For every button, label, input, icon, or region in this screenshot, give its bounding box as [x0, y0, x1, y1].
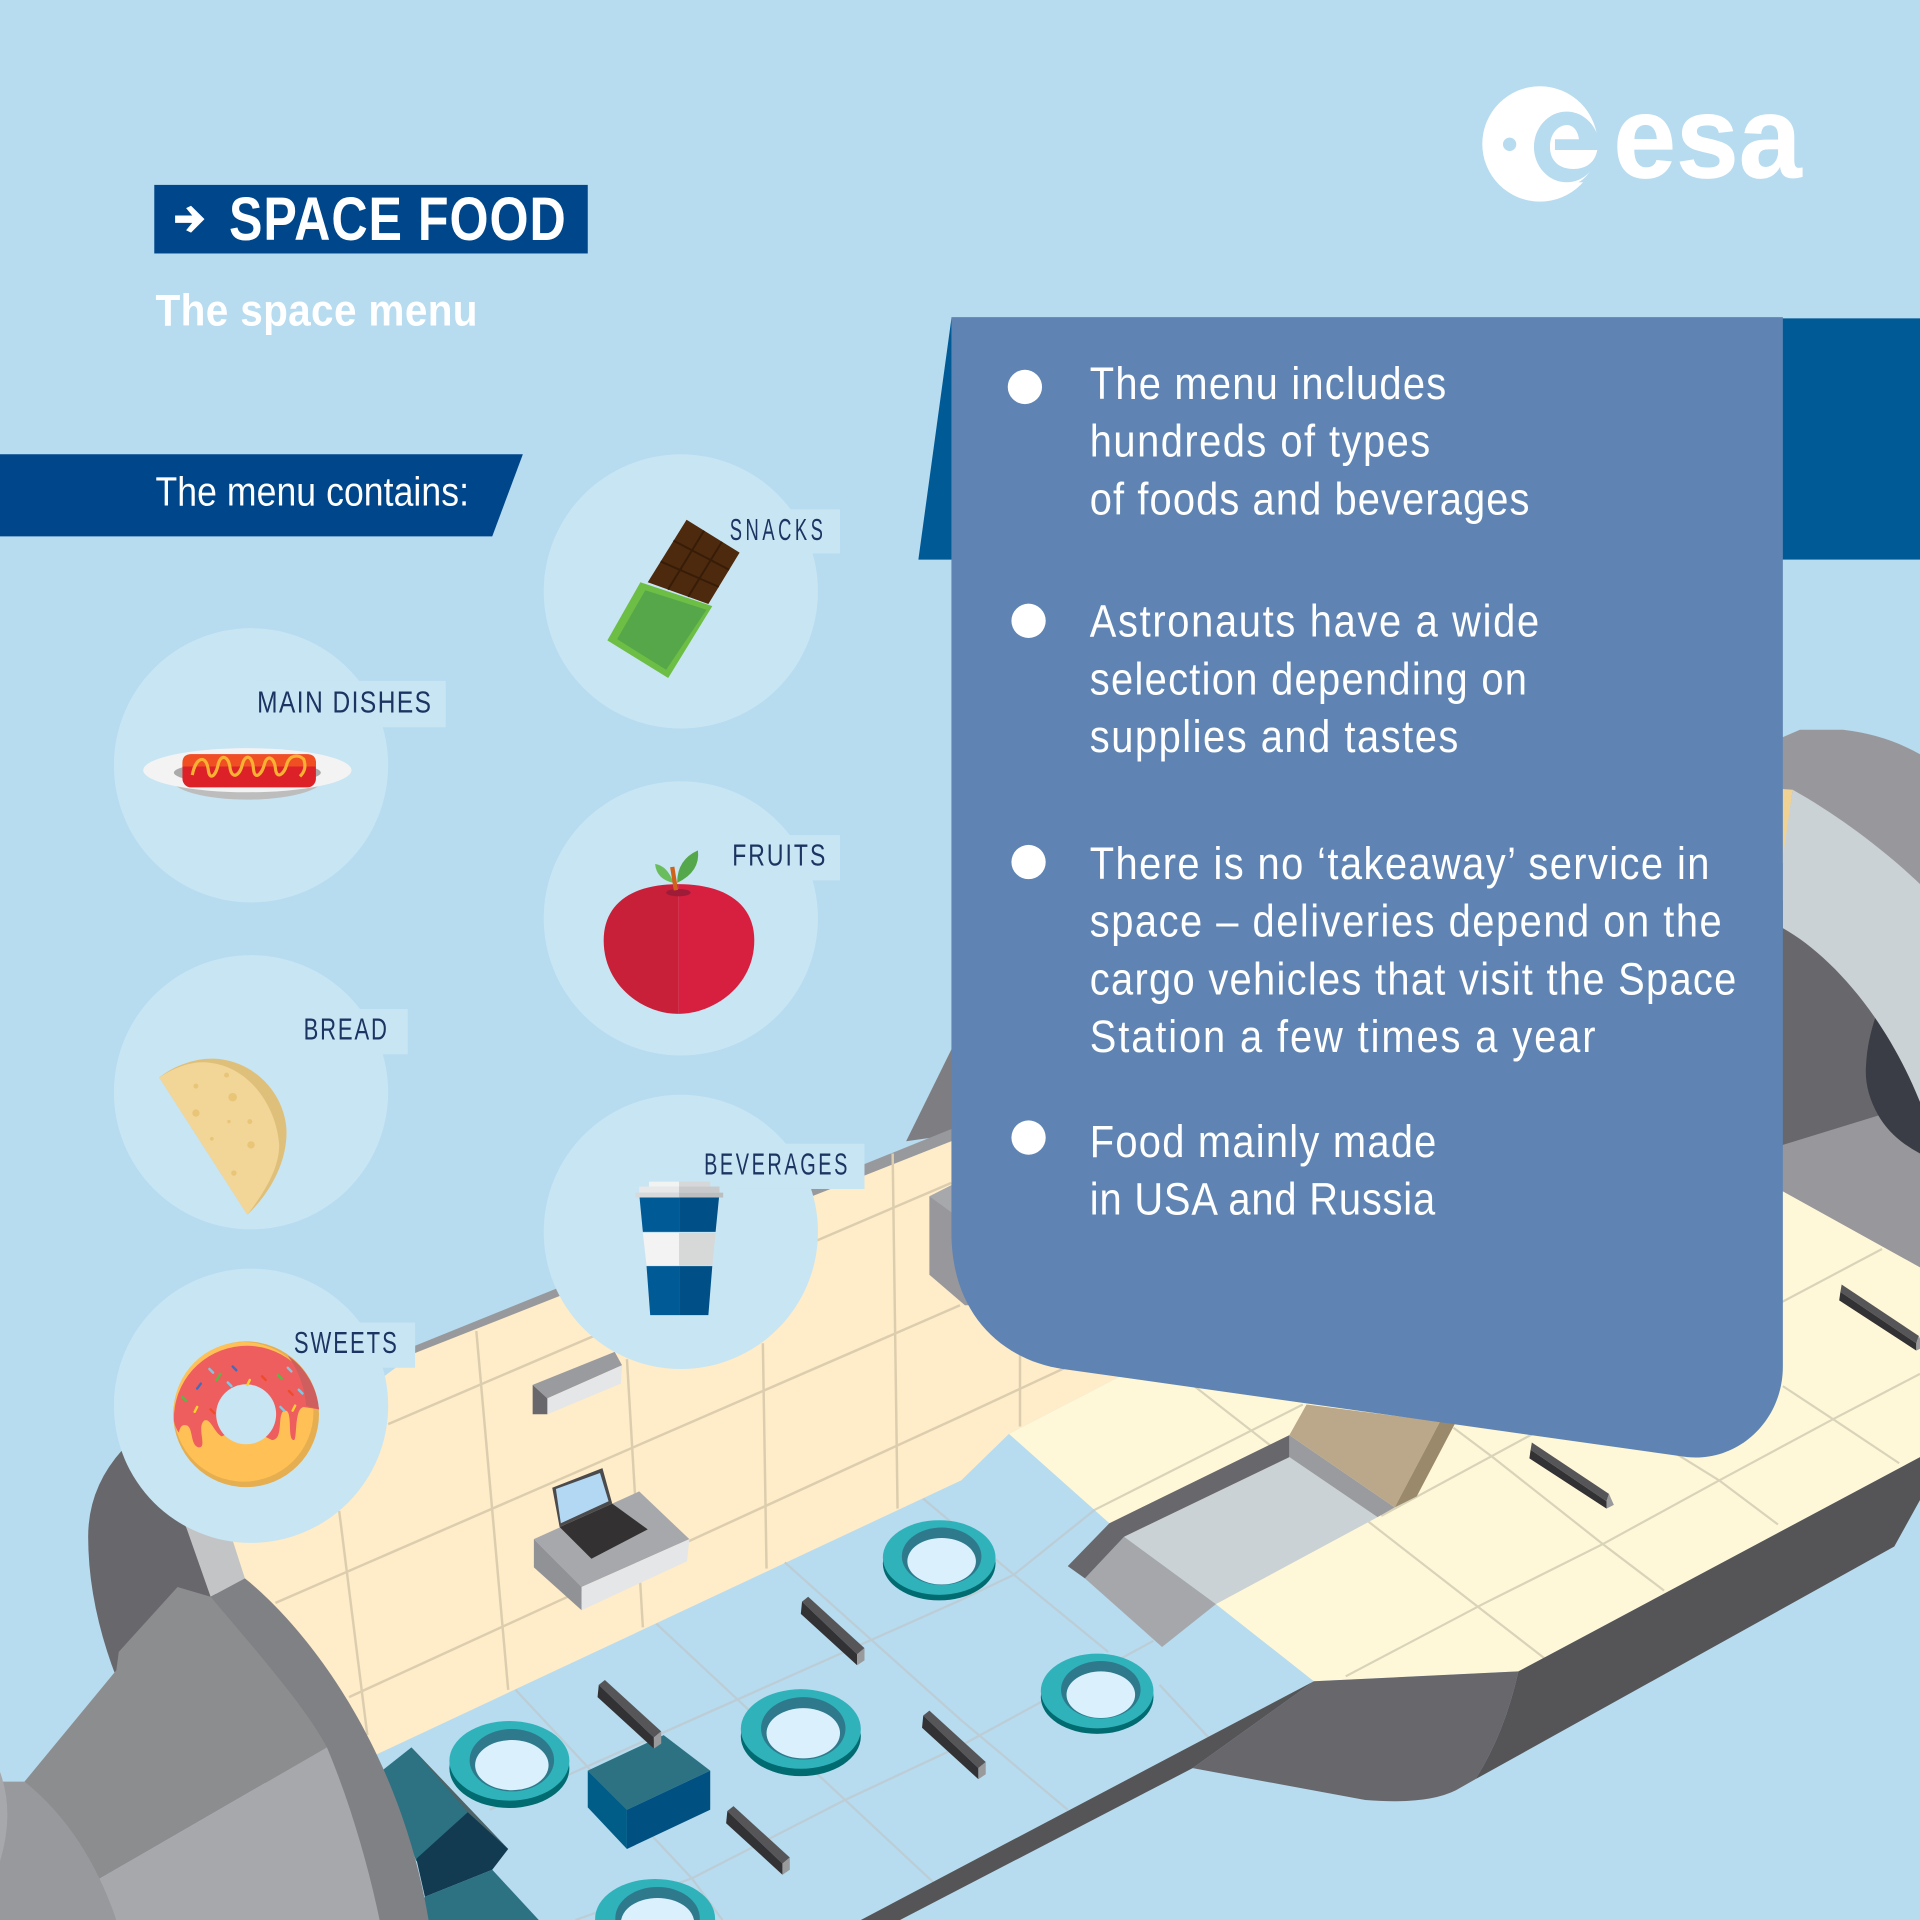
- bullet: hundreds of foods: hundreds of types: [1090, 416, 1430, 467]
- food circle: fruits: FRUITS: [732, 839, 825, 873]
- bullet: made in USA and Russia: in USA and Russia: [1090, 1174, 1435, 1225]
- left end module of the station: [0, 1450, 429, 1920]
- floor handrails: [598, 1284, 1920, 1875]
- teal floor cube: [588, 1735, 710, 1849]
- title: SPACE FOOD: [229, 184, 566, 253]
- floor underside: [861, 1457, 1920, 1920]
- bullet: hundreds of foods: of foods and beverages: [1090, 474, 1529, 525]
- bullet: hundreds of foods: [1008, 359, 1529, 525]
- bullet: made in USA and Russia: Food mainly made: [1090, 1117, 1436, 1168]
- bullet: no takeaway: Station a few times a year: [1090, 1011, 1595, 1062]
- icon: apple: [604, 850, 754, 1014]
- icon: sausage on plate: [143, 748, 351, 800]
- recessed pit in floor: [1068, 1404, 1455, 1647]
- food circle: bread: BREAD: [304, 1012, 387, 1046]
- food circle: bread: [114, 955, 408, 1229]
- teal module at bottom left: [382, 1747, 539, 1920]
- floor rings: [449, 1520, 1153, 1920]
- bullet: hundreds of foods: The menu includes: [1090, 359, 1446, 410]
- right end module of the station: [1763, 730, 1920, 1298]
- icon: donut: [173, 1341, 319, 1487]
- bullet: wide selection: Astronauts have a wide: [1090, 596, 1539, 647]
- icon: chocolate bar: [607, 520, 740, 678]
- subtitle: The space menu: [156, 286, 478, 335]
- cream floor grid lines: [1095, 1249, 1920, 1676]
- food circle: fruits: [544, 781, 840, 1056]
- cream wall: [196, 1102, 1118, 1755]
- bullet: wide selection: [1011, 596, 1539, 762]
- bullet: made in USA and Russia: [1011, 1117, 1436, 1225]
- blue floor grid lines: [490, 1499, 1209, 1920]
- wall box under panel: [929, 1185, 980, 1305]
- icon: laptop on desk: [534, 1468, 689, 1610]
- food circle: main dishes: MAIN DISHES: [257, 685, 431, 719]
- esa logo: [1482, 71, 1803, 202]
- bullet: no takeaway: cargo vehicles that visit the Space: [1090, 954, 1736, 1005]
- gray rail along top of wall: [415, 1123, 967, 1354]
- main text panel: [951, 317, 1783, 1458]
- wall grid lines: [276, 1153, 1102, 1735]
- bullet: wide selection: selection depending on: [1090, 654, 1527, 705]
- food circle: snacks: SNACKS: [730, 513, 823, 547]
- cream floor section: [1009, 1191, 1920, 1681]
- food circle: beverages: [544, 1095, 864, 1369]
- bullet: wide selection: supplies and tastes: [1090, 711, 1458, 762]
- bullet: no takeaway: space – deliveries depend on the: [1090, 896, 1722, 947]
- gray corner piece above the wall: [906, 1049, 967, 1141]
- food circle: snacks: [544, 454, 840, 729]
- bullet: no takeaway: There is no ‘takeaway’ service in: [1090, 839, 1709, 890]
- icon: flatbread: [159, 1059, 287, 1215]
- esa logo: esa: [1613, 71, 1803, 202]
- back band behind text panel: [918, 318, 1920, 560]
- banner: the menu contains: The menu contains:: [156, 471, 469, 515]
- food circle: main dishes: [114, 628, 446, 902]
- food circle: sweets: SWEETS: [294, 1326, 397, 1360]
- wall shelf: [533, 1352, 622, 1414]
- icon: takeaway cup: [636, 1182, 723, 1315]
- food circle: sweets: [114, 1269, 415, 1543]
- food circle: beverages: BEVERAGES: [704, 1148, 847, 1181]
- banner: the menu contains: [0, 454, 523, 536]
- bullet: no takeaway: [1011, 839, 1736, 1062]
